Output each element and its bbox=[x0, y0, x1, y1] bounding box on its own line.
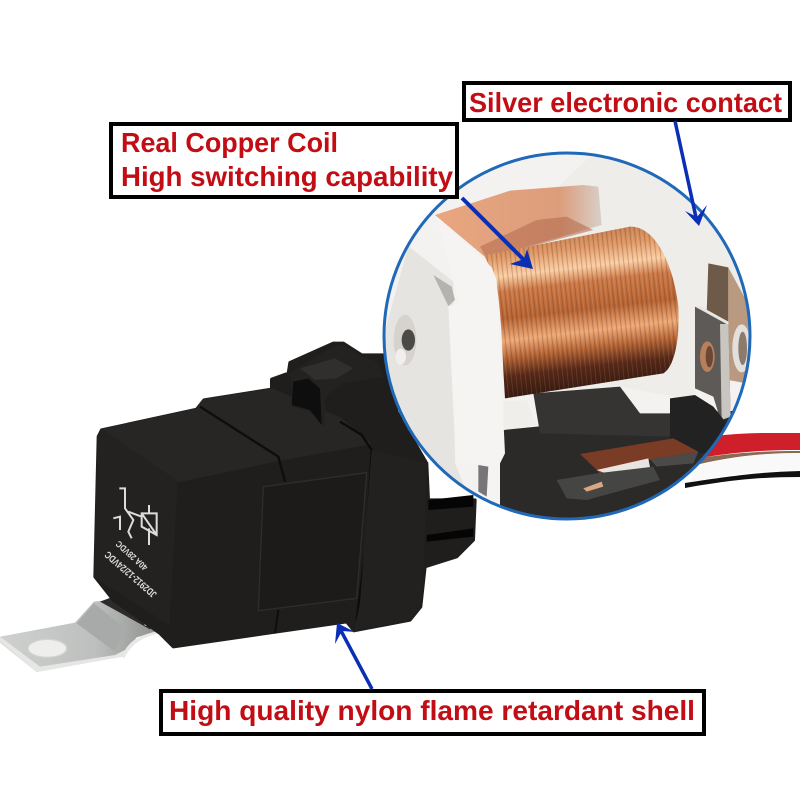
housing body bbox=[95, 343, 475, 647]
callout: real copper coil: High switching capability bbox=[121, 161, 453, 192]
silver contact column and right terminal bbox=[695, 263, 748, 420]
printed relay specification: 40A 28VDC bbox=[113, 539, 150, 573]
printed relay specification: JD2912-12/24VDC bbox=[103, 548, 159, 599]
callout: silver electronic contact: Silver electronic contact bbox=[469, 87, 782, 118]
arrow: to copper coil bbox=[462, 198, 533, 269]
housing top face bbox=[102, 389, 370, 482]
screw bbox=[394, 315, 416, 365]
magnified circle: copper coil interior bbox=[373, 150, 757, 523]
side rib bbox=[340, 422, 372, 620]
wires bbox=[685, 433, 800, 488]
arrow: to silver contact bbox=[675, 121, 707, 226]
copper coil bbox=[484, 227, 679, 398]
white bobbin bar bbox=[504, 430, 506, 431]
white left flange bbox=[436, 216, 505, 523]
circle outline bbox=[384, 153, 750, 519]
side connector slots bbox=[427, 495, 473, 542]
peach blurred background bbox=[435, 185, 602, 258]
inner light background bbox=[386, 154, 742, 494]
callout: nylon flame retardant shell: High quality nylon flame retardant shell bbox=[169, 695, 695, 726]
housing end face bbox=[95, 430, 177, 623]
top clip bbox=[288, 345, 383, 427]
callout: real copper coil bbox=[111, 124, 457, 197]
label panel bbox=[258, 473, 367, 611]
callout: nylon flame retardant shell bbox=[161, 691, 704, 734]
printed relay specification bbox=[103, 488, 159, 599]
bottom copper contact bbox=[557, 438, 698, 500]
callout: real copper coil: Real Copper Coil bbox=[121, 127, 338, 158]
lower dark base bbox=[500, 410, 732, 518]
arrow: to nylon shell bbox=[335, 623, 372, 689]
rear white wall bbox=[530, 150, 757, 397]
left metal plate bbox=[386, 247, 464, 486]
mounting lug bbox=[0, 597, 160, 672]
black socket block bbox=[670, 395, 726, 453]
relay: black nylon housing with mounting lug bbox=[0, 343, 475, 672]
